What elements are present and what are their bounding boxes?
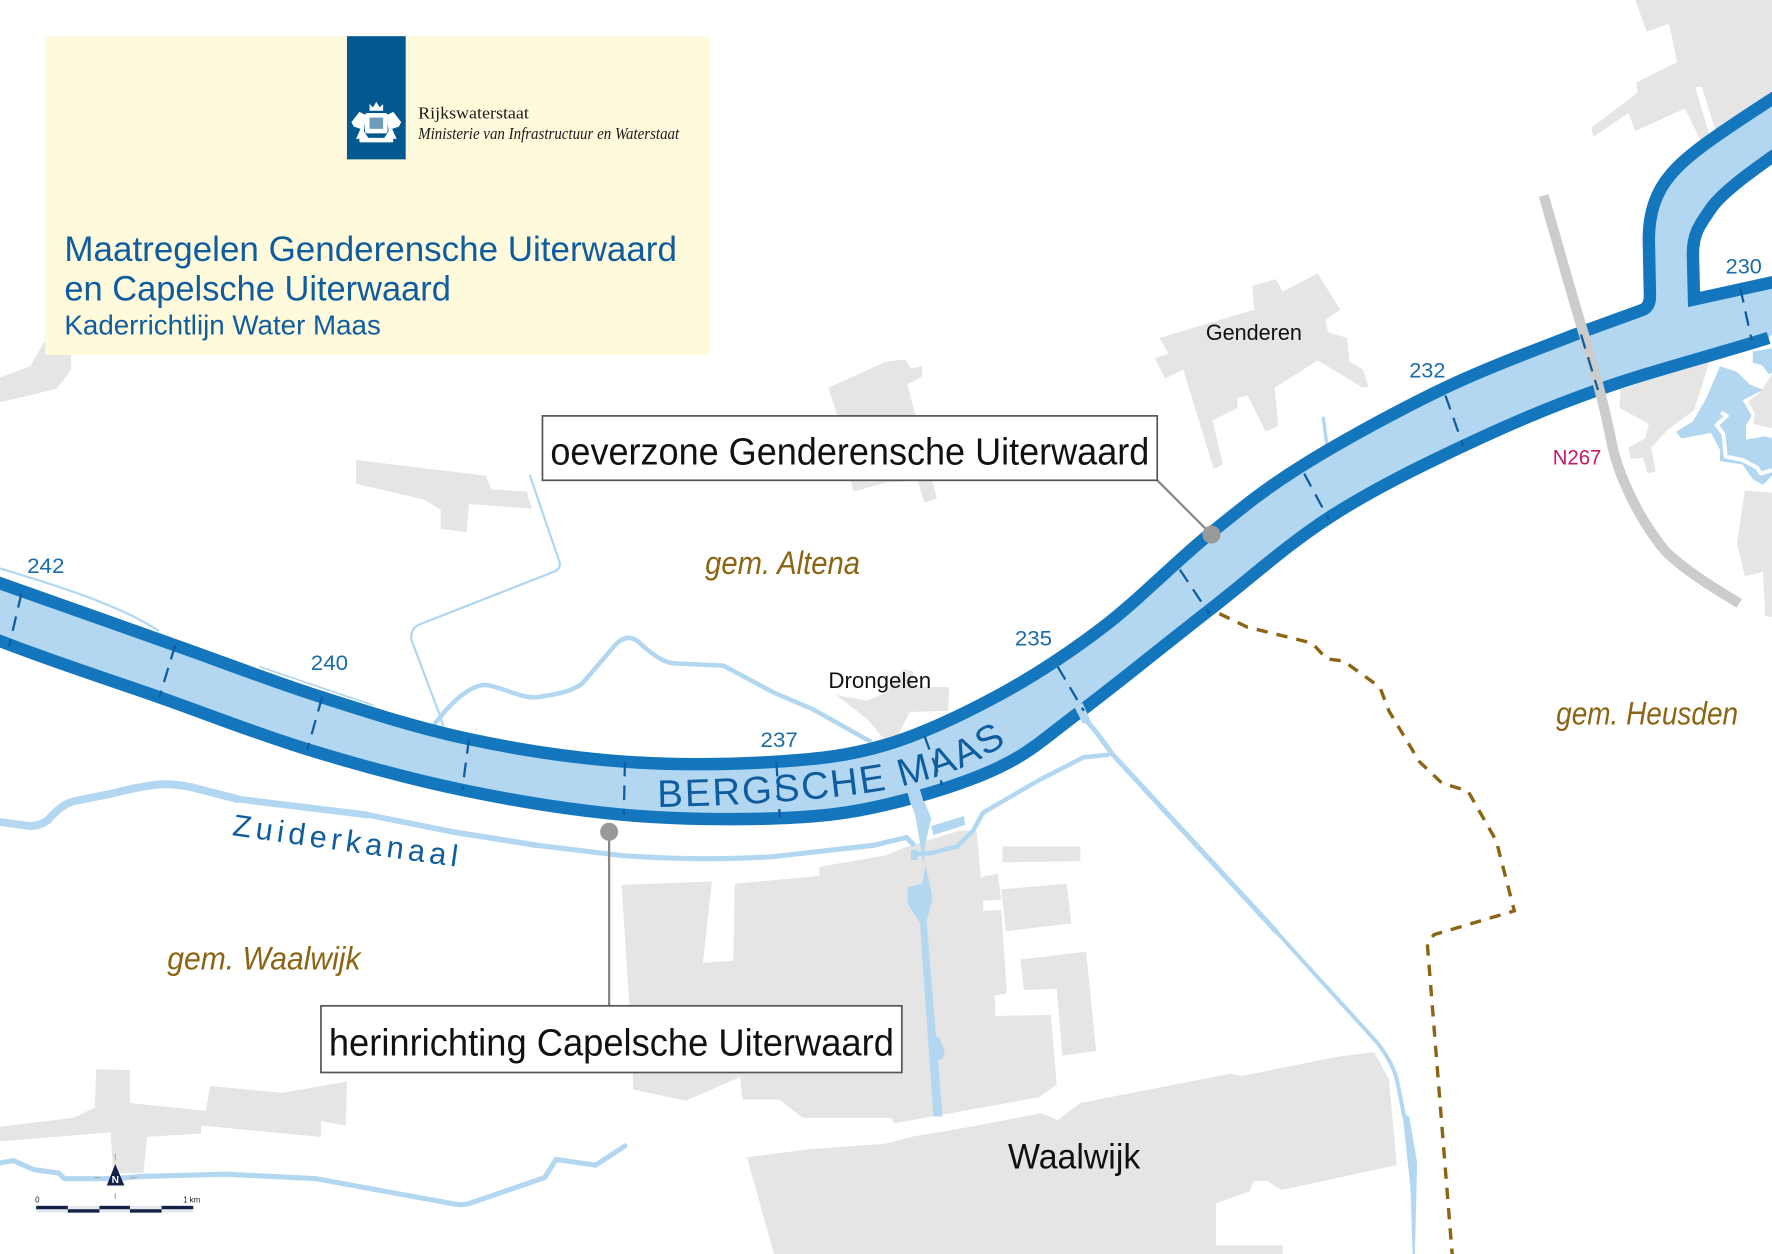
km numbers: 235 xyxy=(1015,626,1052,650)
place names xyxy=(828,320,1302,1177)
river name: BERGSCHE MAAS xyxy=(660,724,1003,807)
km numbers xyxy=(27,255,1762,752)
km numbers: 237 xyxy=(761,728,798,752)
small waterways xyxy=(0,418,1417,1254)
canal mouth over river bank xyxy=(906,785,924,805)
title xyxy=(64,230,677,341)
title: Kaderrichtlijn Water Maas xyxy=(64,310,381,341)
km numbers: 242 xyxy=(27,554,64,578)
callout: oeverzone Genderensche Uiterwaard xyxy=(542,416,1221,544)
industrial canal xyxy=(906,788,965,1117)
municipality names: gem. Heusden xyxy=(1556,694,1738,731)
river Bergsche Maas xyxy=(0,96,1772,819)
municipality names: gem. Waalwijk xyxy=(167,940,362,977)
place names: Genderen xyxy=(1206,320,1302,345)
logo: Rijksoverheid lint with emblem xyxy=(347,36,406,159)
callout: herinrichting Capelsche Uiterwaard: herinrichting Capelsche Uiterwaard xyxy=(329,1022,894,1065)
canal mouth at km 235 xyxy=(1074,703,1092,723)
scale bar: 0 xyxy=(35,1195,40,1204)
logo wordmark: Ministerie van Infrastructuur en Waterstaat xyxy=(417,124,680,143)
scale bar: 1 km xyxy=(183,1195,201,1204)
icon: north arrow xyxy=(94,1154,137,1199)
title: Maatregelen Genderensche Uiterwaard xyxy=(64,230,677,269)
road N267 xyxy=(1544,196,1739,603)
title: en Capelsche Uiterwaard xyxy=(64,270,451,309)
icon: north arrow: N xyxy=(112,1175,119,1186)
place names: Drongelen xyxy=(828,668,931,693)
km numbers: 232 xyxy=(1409,358,1445,382)
logo wordmark xyxy=(417,104,680,143)
lake xyxy=(1676,348,1772,485)
place names: Waalwijk xyxy=(1008,1138,1141,1177)
km numbers: 240 xyxy=(311,651,348,675)
municipality names: gem. Altena xyxy=(705,544,860,581)
callout: oeverzone Genderensche Uiterwaard: oeverzone Genderensche Uiterwaard xyxy=(550,430,1149,473)
header panel xyxy=(45,36,710,355)
road label N267: N267 xyxy=(1553,445,1601,469)
km numbers: 230 xyxy=(1726,255,1762,279)
canal name Zuiderkanaal: Zuiderkanaal xyxy=(231,808,464,874)
logo wordmark: Rijkswaterstaat xyxy=(418,104,529,123)
municipal boundary xyxy=(1219,614,1514,1254)
scale bar xyxy=(35,1195,201,1213)
municipality names xyxy=(167,544,1738,977)
kilometre markers xyxy=(9,288,1752,818)
callout: herinrichting Capelsche Uiterwaard xyxy=(321,823,902,1072)
